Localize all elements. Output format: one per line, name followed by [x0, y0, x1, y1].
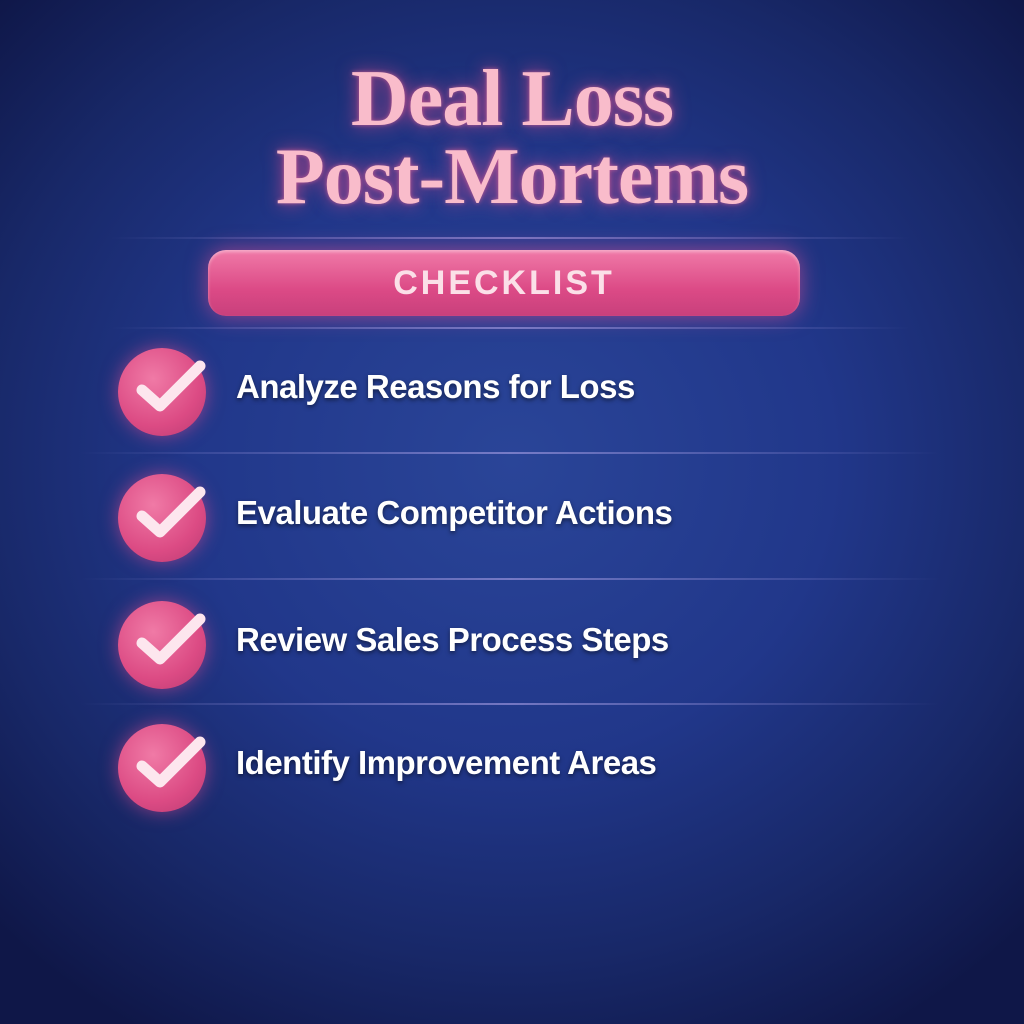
- text 1: Analyze Reasons for Loss: [236, 368, 635, 405]
- item 3: [106, 590, 670, 700]
- item 4: [106, 712, 658, 824]
- icon: check 1: [118, 348, 206, 436]
- icon: check 3: [118, 601, 206, 689]
- title: Deal Loss: [351, 55, 673, 143]
- title: [270, 55, 758, 221]
- checklist pill heading: CHECKLIST: [393, 264, 615, 302]
- title: Post-Mortems: [276, 133, 748, 221]
- text 3: Review Sales Process Steps: [236, 621, 669, 658]
- icon: check 2: [118, 474, 206, 562]
- checklist pill heading: [208, 250, 800, 316]
- item 1: [106, 336, 636, 448]
- item 2: [106, 462, 674, 574]
- icon: check 4: [118, 724, 206, 812]
- text 4: Identify Improvement Areas: [236, 744, 656, 781]
- text 2: Evaluate Competitor Actions: [236, 494, 672, 531]
